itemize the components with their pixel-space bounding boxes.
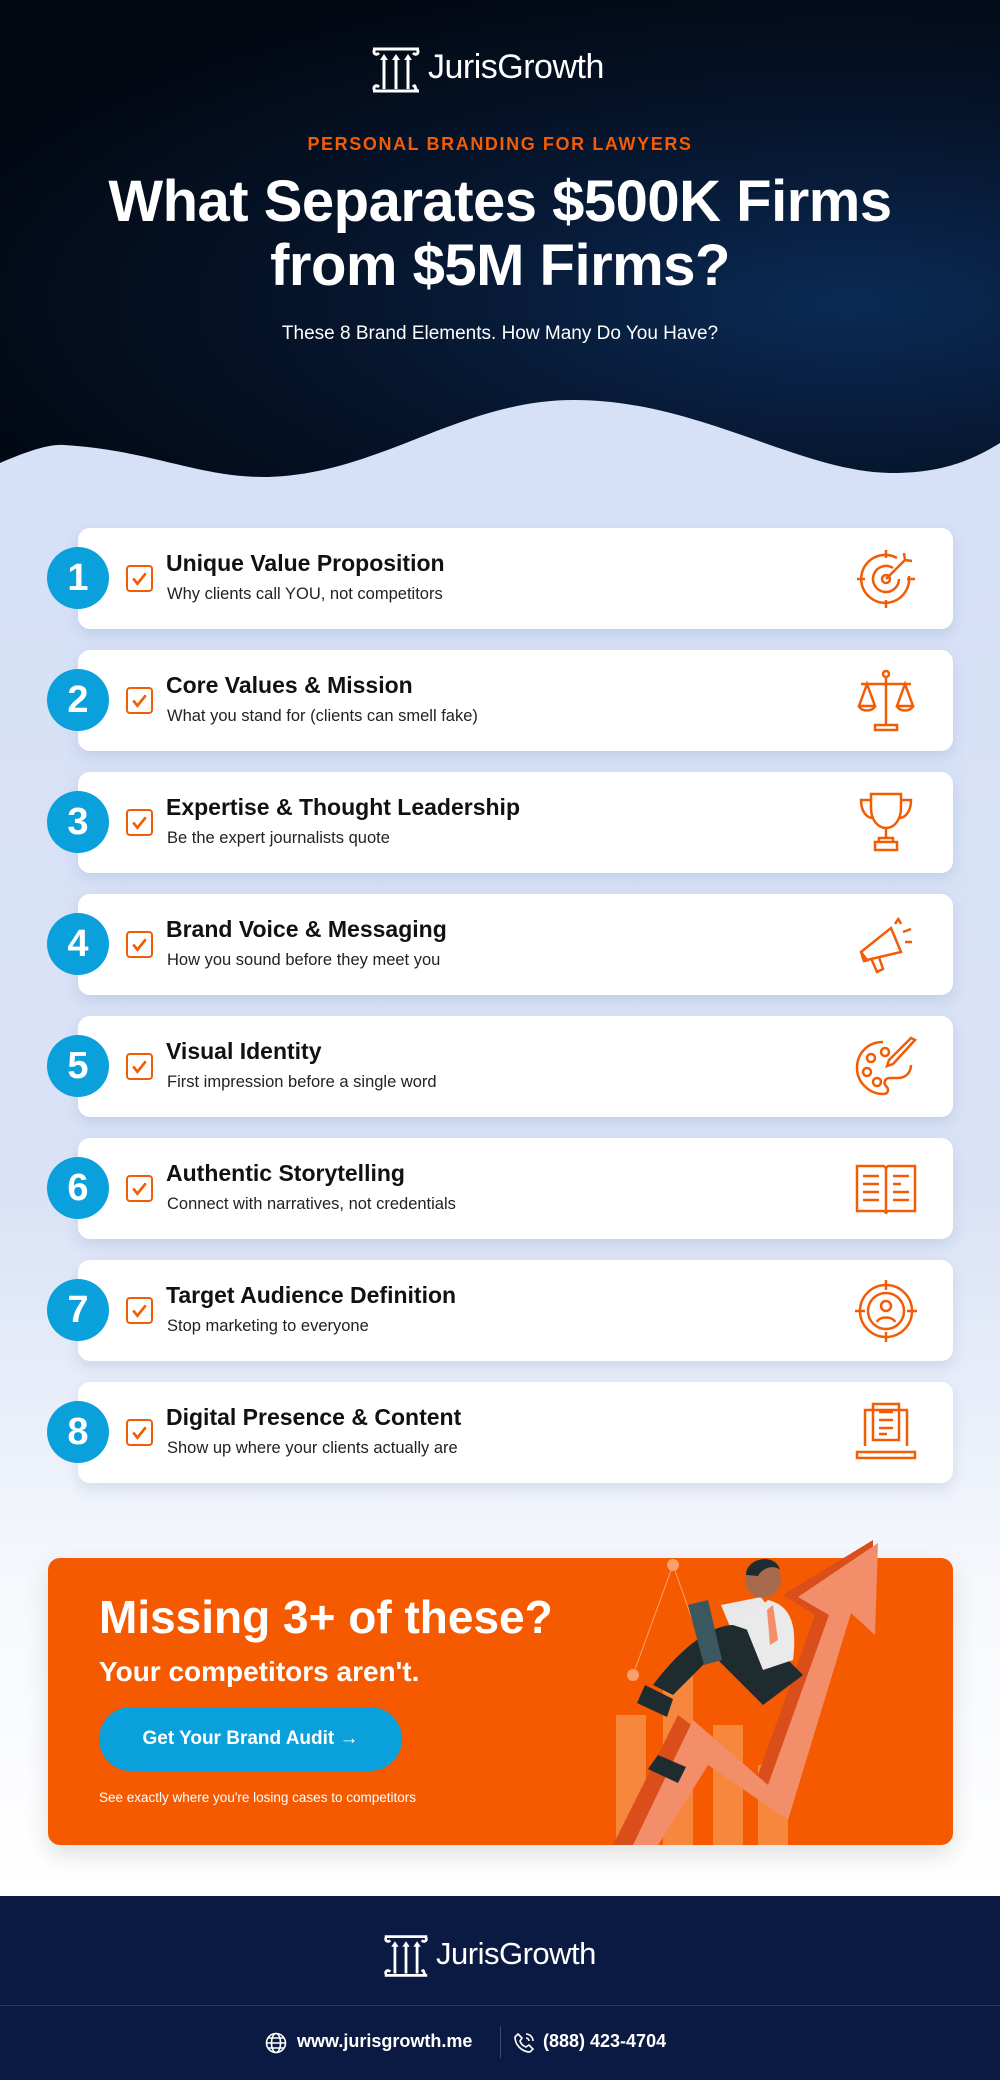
card 5: Visual Identity <box>166 1038 322 1064</box>
card 1: Why clients call YOU, not competitors <box>167 585 443 603</box>
text: 2 <box>67 679 89 721</box>
text: 4 <box>67 923 89 965</box>
icon: palette <box>856 1036 917 1096</box>
card 8: Show up where your clients actually are <box>167 1439 458 1457</box>
icon: scales <box>857 670 915 732</box>
subtitle: These 8 Brand Elements. How Many Do You Have? <box>282 323 718 344</box>
CTA panel <box>48 1558 953 1845</box>
contact info: (888) 423-4704 <box>543 2031 666 2051</box>
text: 7 <box>67 1289 89 1331</box>
card 4 <box>78 894 953 995</box>
text: 6 <box>67 1167 89 1209</box>
CTA headline: Missing 3+ of these? <box>99 1591 553 1643</box>
card 1: Unique Value Proposition <box>166 550 445 576</box>
logo top: JurisGrowth <box>428 48 604 86</box>
text: 1 <box>67 557 89 599</box>
card 1 <box>78 528 953 629</box>
icon: book <box>856 1164 916 1214</box>
title: What Separates $500K Firms <box>108 169 892 234</box>
icon: laptop <box>856 1402 916 1460</box>
text: 3 <box>67 801 89 843</box>
icon: trophy <box>860 792 912 852</box>
icon: target <box>857 550 915 608</box>
icon: audience target <box>855 1280 917 1342</box>
card 4: How you sound before they meet you <box>167 951 440 969</box>
CTA button <box>99 1707 402 1771</box>
wave divider <box>0 400 1000 500</box>
card 6: Authentic Storytelling <box>166 1160 405 1186</box>
card 7: Target Audience Definition <box>166 1282 456 1308</box>
card 7 <box>78 1260 953 1361</box>
logo top <box>372 48 604 92</box>
card 8 <box>78 1382 953 1483</box>
footer logo: JurisGrowth <box>436 1936 596 1971</box>
card 5: First impression before a single word <box>167 1073 437 1091</box>
card 2: Core Values & Mission <box>166 672 413 698</box>
icon: globe <box>266 2032 286 2054</box>
contact info: www.jurisgrowth.me <box>297 2031 472 2051</box>
contact info <box>266 2026 666 2058</box>
footer logo <box>384 1935 596 1977</box>
card 6 <box>78 1138 953 1239</box>
hero background <box>0 0 1000 505</box>
card 3 <box>78 772 953 873</box>
text: 8 <box>67 1411 89 1453</box>
illustration: man on growth arrow <box>613 1540 878 1845</box>
card 7: Stop marketing to everyone <box>167 1317 369 1335</box>
card 8: Digital Presence & Content <box>166 1404 461 1430</box>
card 4: Brand Voice & Messaging <box>166 916 447 942</box>
main light background <box>0 500 1000 1896</box>
icon: phone <box>514 2033 534 2053</box>
card 2 <box>78 650 953 751</box>
card 5 <box>78 1016 953 1117</box>
card 3: Be the expert journalists quote <box>167 829 390 847</box>
icon: megaphone <box>859 917 912 974</box>
footer <box>0 1896 1000 2080</box>
eyebrow: PERSONAL BRANDING FOR LAWYERS <box>307 134 693 154</box>
text: 5 <box>67 1045 89 1087</box>
card 2: What you stand for (clients can smell fake) <box>167 707 478 725</box>
title: from $5M Firms? <box>270 233 730 298</box>
title <box>108 169 892 298</box>
card 6: Connect with narratives, not credentials <box>167 1195 456 1213</box>
CTA subheadline: Your competitors aren't. <box>99 1656 419 1687</box>
CTA button: Get Your Brand Audit → <box>142 1728 359 1749</box>
CTA note: See exactly where you're losing cases to competitors <box>99 1790 416 1805</box>
card 3: Expertise & Thought Leadership <box>166 794 520 820</box>
